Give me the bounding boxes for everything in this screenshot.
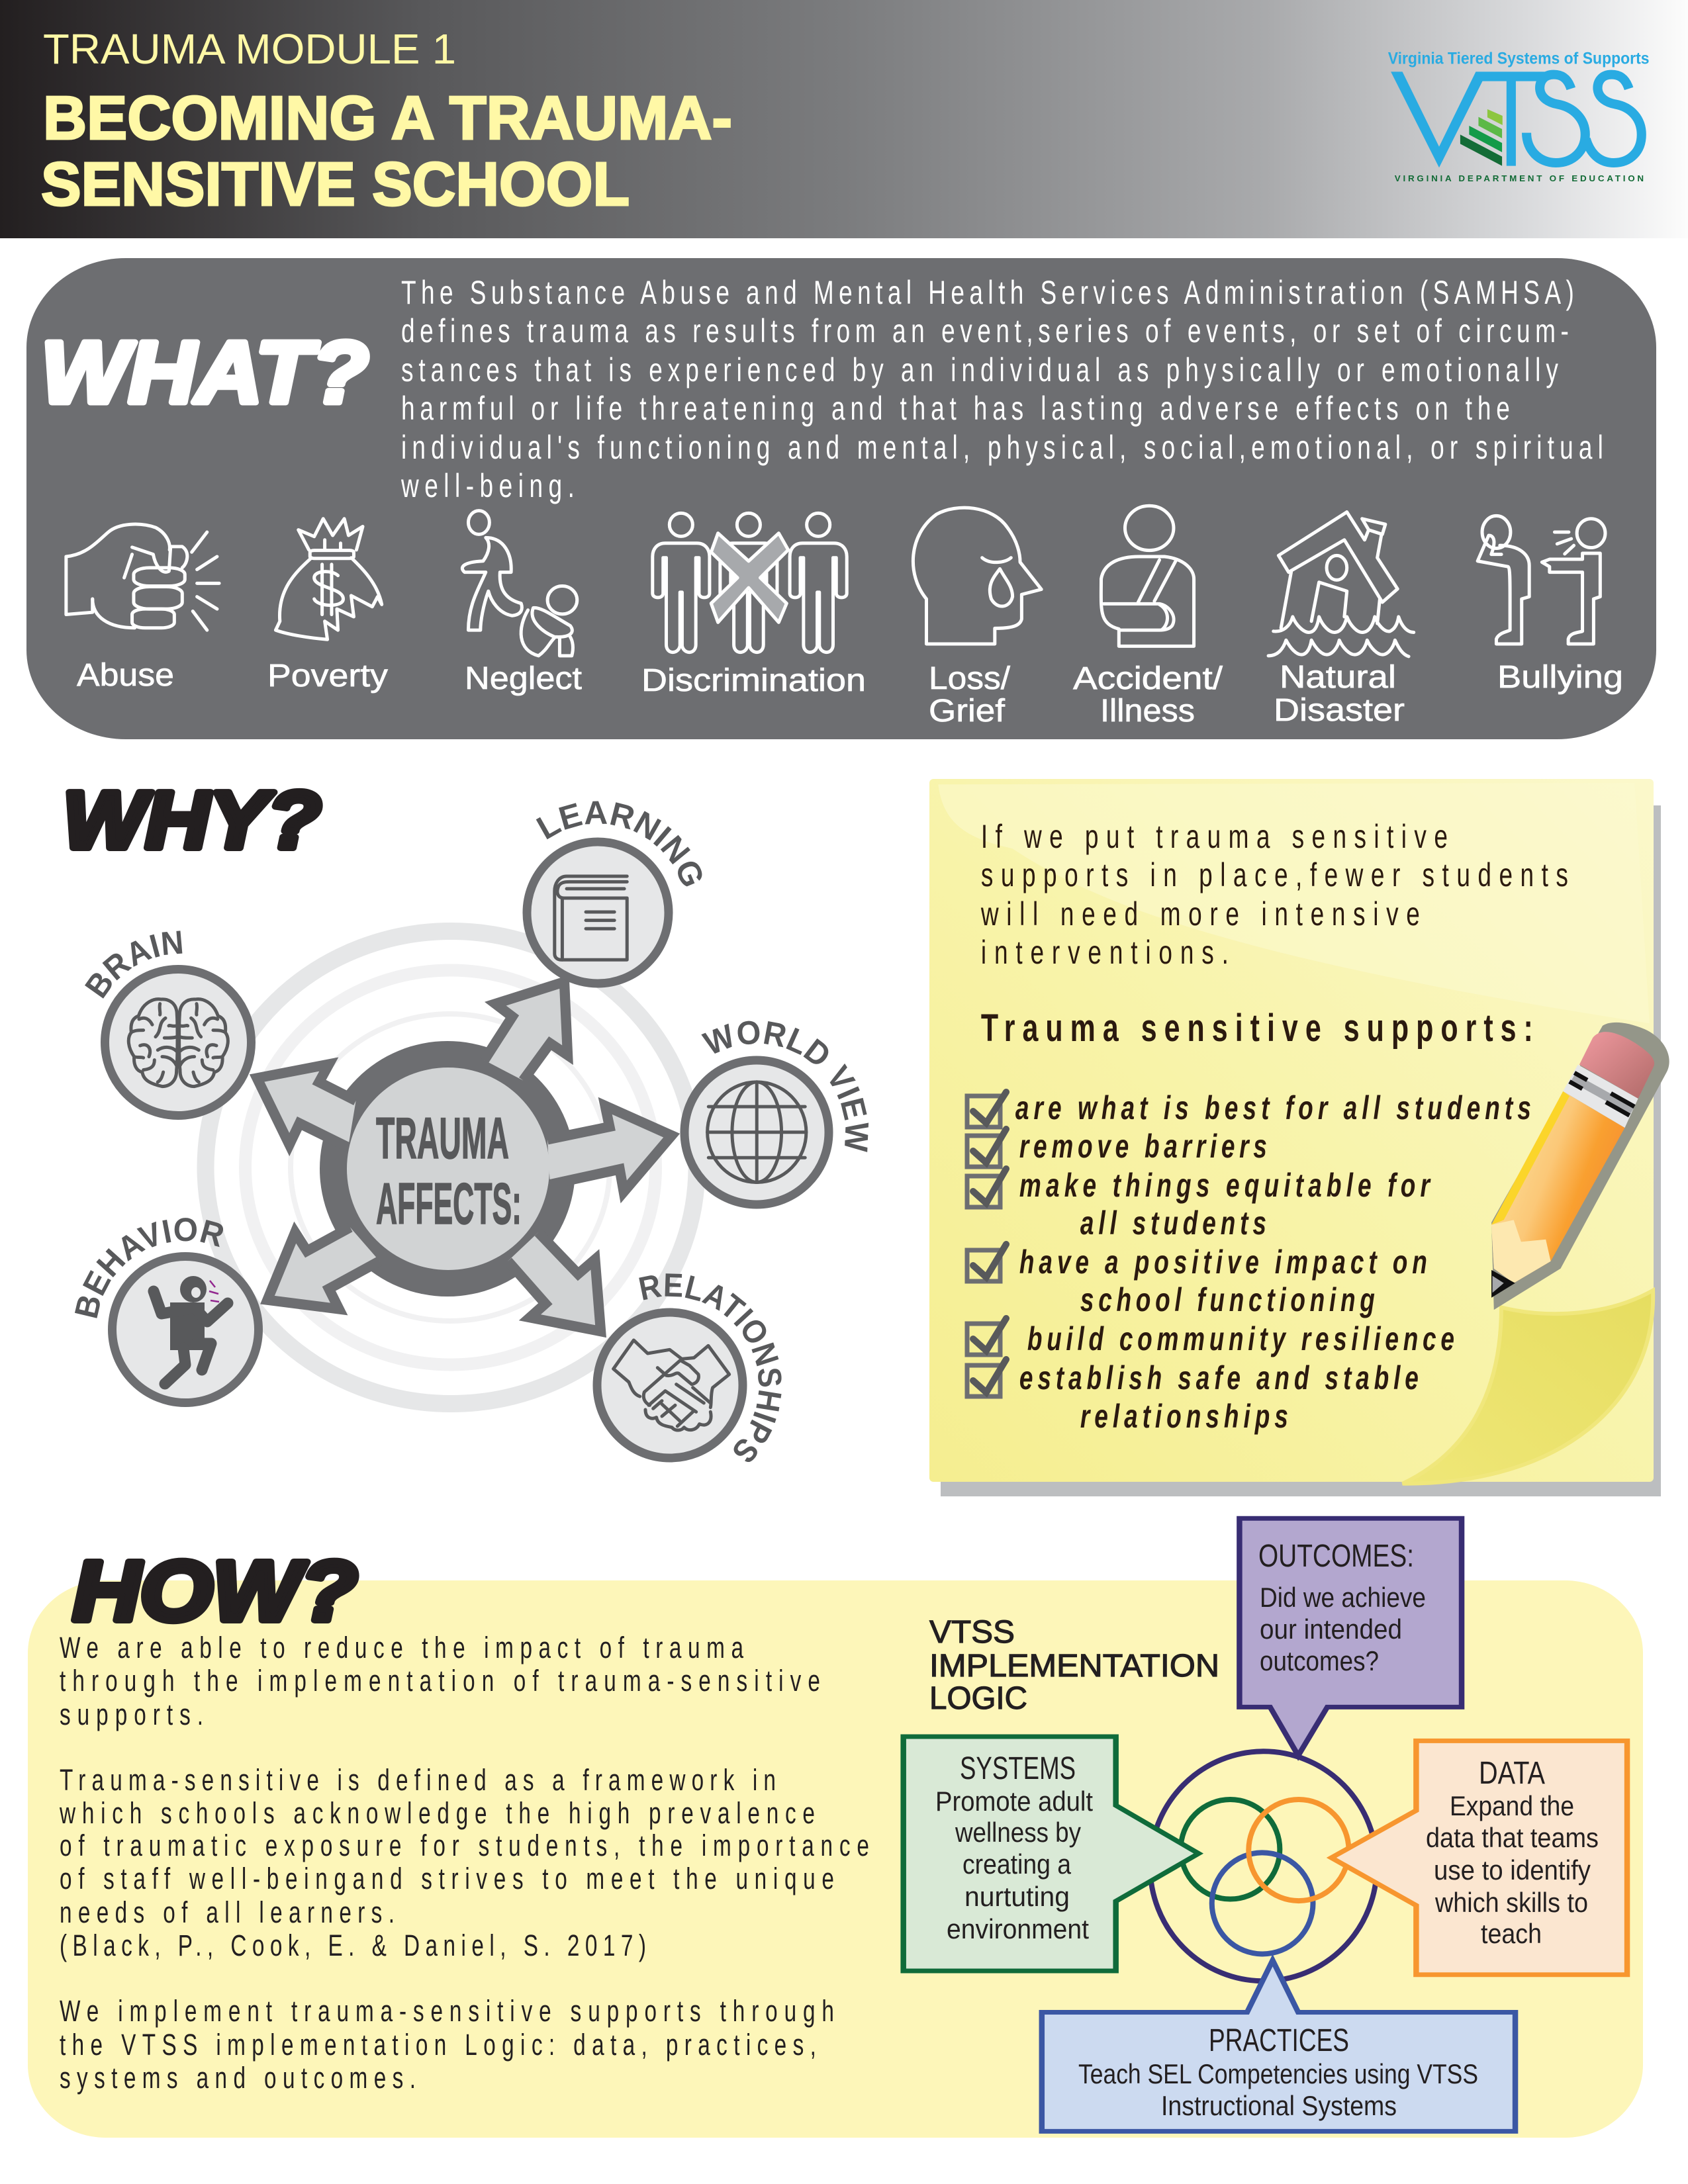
node: relationships [593, 1273, 782, 1463]
callout: systems: environment [947, 1913, 1089, 1944]
icon: poverty money bag [275, 519, 382, 639]
center label: AFFECTS: [376, 1171, 522, 1236]
title [41, 83, 732, 218]
text block: how explanation: of traumatic exposure for students, the importance [60, 1829, 869, 1862]
VTSS logo: VIRGINIA DEPARTMENT OF EDUCATION [1395, 173, 1644, 183]
icon labels: Disaster [1274, 693, 1405, 728]
icon labels [77, 658, 1623, 729]
checklist: make things equitable for [1019, 1167, 1431, 1204]
callout: data [1331, 1741, 1627, 1975]
center label: TRAUMA [376, 1105, 509, 1171]
text block: how explanation: Trauma-sensitive is defined as a framework in [60, 1764, 776, 1797]
concentric rings [205, 931, 696, 1404]
diagram: trauma affects [74, 801, 868, 1463]
note heading: Trauma sensitive supports: [981, 1007, 1533, 1050]
callout: systems [904, 1737, 1199, 1971]
heading: how: HOW? [73, 1544, 357, 1639]
checklist: build community resilience [1027, 1321, 1454, 1357]
title: SENSITIVE SCHOOL [41, 150, 630, 218]
callout: outcomes: outcomes? [1260, 1645, 1379, 1676]
callout: practices: Instructional Systems [1161, 2090, 1397, 2121]
note shadow [941, 805, 1661, 1496]
callout: systems: creating a [962, 1848, 1072, 1880]
note intro text: If we put trauma sensitive [981, 819, 1448, 855]
callout: practices: Teach SEL Competencies using VTSS [1078, 2058, 1478, 2089]
VTSS logo [1388, 50, 1650, 183]
icon labels: Bullying [1497, 660, 1623, 695]
center label [376, 1105, 522, 1236]
text block: how explanation: needs of all learners. [60, 1896, 395, 1929]
text block: trauma definition [400, 275, 1603, 504]
pencil [1491, 1023, 1669, 1310]
node: brain: BRAIN [85, 931, 183, 999]
text block: how explanation: through the implementation of trauma-sensitive [60, 1664, 820, 1698]
icon: neglect [462, 511, 577, 656]
text block: how explanation: the VTSS implementation Logic: data, practices, [60, 2028, 816, 2062]
title: BECOMING A TRAUMA- [43, 83, 732, 152]
heading: VTSS implementation logic: IMPLEMENTATION [929, 1649, 1219, 1684]
node: behavior: BEHAVIOR [74, 1218, 224, 1318]
icon labels: Accident/ [1073, 661, 1223, 696]
text block: how explanation: (Black, P., Cook, E. & Daniel, S. 2017) [60, 1929, 646, 1962]
callout: outcomes [1239, 1518, 1462, 1756]
heading: VTSS implementation logic: VTSS [929, 1615, 1015, 1650]
text block: how explanation: We are able to reduce the impact of trauma [60, 1631, 744, 1664]
callout: outcomes: OUTCOMES: [1258, 1539, 1414, 1574]
text block: trauma definition: harmful or life threatening and that has lasting adverse effects on the [401, 390, 1510, 427]
icon: loss and grief [913, 508, 1041, 644]
note intro text: supports in place,fewer students [981, 857, 1568, 893]
text block: how explanation: systems and outcomes. [60, 2062, 416, 2095]
callout: outcomes: Did we achieve [1260, 1582, 1426, 1613]
panel: how [28, 1518, 1643, 2138]
callout: data: DATA [1479, 1756, 1545, 1791]
text block: how explanation [59, 1631, 869, 2095]
checklist: relationships [1080, 1398, 1288, 1435]
callout: data: which skills to [1434, 1887, 1588, 1918]
checklist: are what is best for all students [1015, 1090, 1531, 1126]
text block: how explanation: supports. [60, 1698, 203, 1731]
page curl [1403, 1291, 1653, 1484]
checklist: school functioning [1080, 1282, 1375, 1318]
note intro text: interventions. [981, 934, 1229, 971]
node: behavior [74, 1218, 263, 1407]
callout: practices [1042, 1960, 1515, 2131]
callout: data: use to identify [1434, 1854, 1591, 1886]
text block: trauma definition: individual's functioning and mental, physical, social,emotional, or spiritual [401, 430, 1603, 466]
callout: outcomes: our intended [1260, 1614, 1402, 1645]
icon: abuse fist [66, 524, 219, 630]
text block: how explanation: of staff well-beingand strives to meet the unique [60, 1862, 834, 1895]
callout: systems: wellness by [955, 1817, 1081, 1848]
text block: trauma definition: well-being. [400, 468, 575, 504]
text block: how explanation: We implement trauma-sensitive supports through [60, 1995, 834, 2028]
node: brain [85, 931, 256, 1120]
text block: trauma definition: defines trauma as results from an event,series of events, or set of circum- [401, 313, 1569, 349]
arrows [257, 982, 672, 1332]
text block: how explanation: which schools acknowledge the high prevalence [59, 1797, 815, 1830]
callout: systems: nurtuting [964, 1881, 1070, 1912]
callout: data: data that teams [1426, 1822, 1599, 1853]
central hub [320, 1041, 575, 1297]
callout: data: Expand the [1450, 1790, 1574, 1821]
panel: what [26, 258, 1656, 739]
icon: natural disaster [1268, 512, 1414, 657]
icon labels: Grief [929, 694, 1006, 729]
node: world view [680, 1021, 868, 1208]
heading: why: WHY? [63, 775, 321, 865]
node: relationships: RELATIONSHIPS [639, 1273, 782, 1462]
icon labels: Neglect [465, 661, 582, 696]
checklist: have a positive impact on [1019, 1244, 1427, 1281]
text block: trauma definition: stances that is experienced by an individual as physically or emotionally [401, 352, 1558, 388]
node: learning [523, 801, 702, 987]
module label: TRAUMA MODULE 1 [43, 25, 456, 73]
icon: accident and illness [1101, 506, 1194, 646]
icon labels: Loss/ [929, 661, 1011, 696]
callout: systems: Promote adult [935, 1786, 1093, 1817]
icon: discrimination [653, 513, 847, 653]
note intro text [980, 819, 1568, 971]
checklist: remove barriers [1019, 1128, 1267, 1165]
icon: bullying [1477, 516, 1605, 644]
icon labels: Poverty [267, 659, 388, 694]
node: world view: WORLD VIEW [701, 1021, 868, 1152]
checklist [967, 1090, 1531, 1435]
note paper [929, 779, 1654, 1482]
icon labels: Illness [1100, 694, 1195, 729]
callout: data: teach [1481, 1918, 1542, 1949]
callout: systems: SYSTEMS [960, 1751, 1076, 1786]
icon labels: Abuse [77, 658, 174, 693]
panel: sticky note [929, 779, 1669, 1496]
checklist: establish safe and stable [1019, 1360, 1419, 1396]
icon: checkboxes [967, 1092, 1006, 1396]
icon labels: Natural [1280, 660, 1396, 695]
heading: what: WHAT? [41, 324, 369, 421]
diagram: logic circles [1150, 1751, 1377, 1981]
note intro text: will need more intensive [980, 896, 1420, 933]
heading: VTSS implementation logic [929, 1615, 1219, 1716]
header banner [0, 0, 1688, 238]
icon labels: Discrimination [641, 663, 866, 698]
callout: practices: PRACTICES [1209, 2023, 1349, 2058]
text block: trauma definition: The Substance Abuse and Mental Health Services Administration (SAMHSA) [401, 275, 1574, 311]
heading: VTSS implementation logic: LOGIC [929, 1681, 1027, 1716]
node: learning: LEARNING [536, 801, 702, 887]
VTSS logo: Virginia Tiered Systems of Supports [1388, 50, 1650, 68]
checklist: all students [1080, 1205, 1266, 1242]
